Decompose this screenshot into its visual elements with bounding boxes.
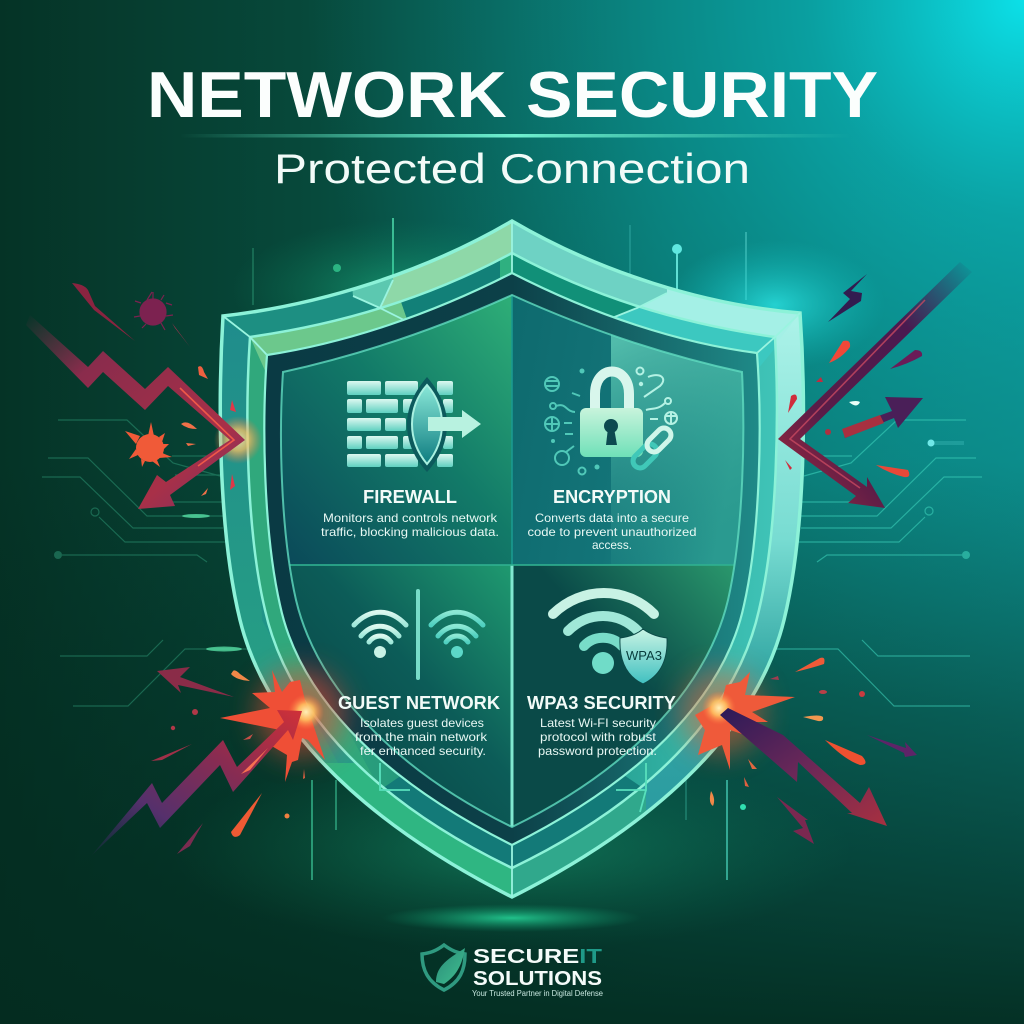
logo — [422, 945, 604, 998]
title rule — [180, 134, 850, 138]
heading: firewall: FIREWALL — [363, 487, 457, 507]
circuit lines: right — [772, 420, 982, 706]
circuit lines: left — [42, 420, 253, 706]
text: wpa3 description: password protection. — [538, 744, 657, 758]
threat: bottom-left burst and arrow — [92, 669, 344, 855]
shield second band — [240, 240, 790, 880]
threat: top-right second arrow — [842, 397, 923, 438]
threat: top-right attack arrow — [778, 262, 972, 508]
text: encryption description: access. — [592, 538, 632, 552]
panel: wpa3 security — [527, 593, 676, 758]
icon: logo shield — [422, 945, 465, 990]
text: guest network description: fer enhanced security. — [360, 744, 486, 758]
text: firewall description: traffic, blocking malicious data. — [321, 525, 499, 539]
panel: firewall — [321, 377, 499, 539]
icon: wifi with WPA3 shield — [553, 593, 667, 684]
subtitle: Protected Connection — [274, 145, 750, 192]
logo second line: SOLUTIONS — [473, 968, 602, 990]
icon: wifi with WPA3 shield: WPA3 — [626, 649, 662, 663]
threat: top-left shards — [72, 283, 236, 496]
threat: bottom-right burst and arrow — [680, 670, 887, 826]
text: wpa3 description: protocol with robust — [540, 730, 657, 744]
text: encryption description: code to prevent unauthorized — [528, 525, 696, 539]
icon: separated wifi signals — [354, 589, 483, 680]
threat: bottom-right small arrows — [777, 735, 917, 844]
heading: guest network: GUEST NETWORK — [338, 693, 500, 713]
shield inner panels — [270, 290, 752, 835]
shield inner outline — [281, 295, 743, 827]
shield outer band — [218, 219, 806, 899]
text: guest network description — [355, 716, 488, 758]
text: wpa3 description — [538, 716, 657, 758]
heading: encryption: ENCRYPTION — [553, 487, 671, 507]
logo wordmark: SECURE IT — [473, 946, 602, 968]
heading: wpa3 security: WPA3 SECURITY — [527, 693, 676, 713]
text: guest network description: from the main network — [355, 730, 488, 744]
shield facet lines — [223, 221, 800, 897]
text: encryption description: Converts data into a secure — [535, 511, 689, 525]
text: guest network description: Isolates guest devices — [360, 716, 484, 730]
threat: top-left orange starburst — [125, 422, 172, 467]
threat: top-right lightning bolt — [828, 274, 867, 322]
text: firewall description: Monitors and controls network — [323, 511, 498, 525]
threat: bottom-left small arrow — [157, 667, 234, 697]
threat: bottom-right sparks — [710, 658, 866, 806]
icon: padlock with chain and data particles — [545, 368, 677, 474]
panel: encryption — [528, 368, 696, 552]
shield — [218, 219, 863, 899]
threat: top-left attack arrow — [26, 315, 262, 509]
shield dark band — [264, 273, 760, 845]
title: NETWORK SECURITY — [147, 58, 878, 131]
vertical light streaks and nodes — [182, 218, 964, 880]
threat: top-right sparks — [785, 341, 922, 477]
threat: top-left virus — [134, 292, 173, 330]
text: wpa3 description: Latest Wi-FI security — [540, 716, 656, 730]
text: firewall description — [321, 511, 499, 539]
icon: brick wall with lens and arrow — [347, 377, 481, 472]
panel: guest network — [338, 589, 500, 758]
text: encryption description — [528, 511, 696, 552]
threat: bottom-left sparks — [151, 670, 305, 854]
logo tagline: Your Trusted Partner in Digital Defense — [472, 989, 604, 998]
